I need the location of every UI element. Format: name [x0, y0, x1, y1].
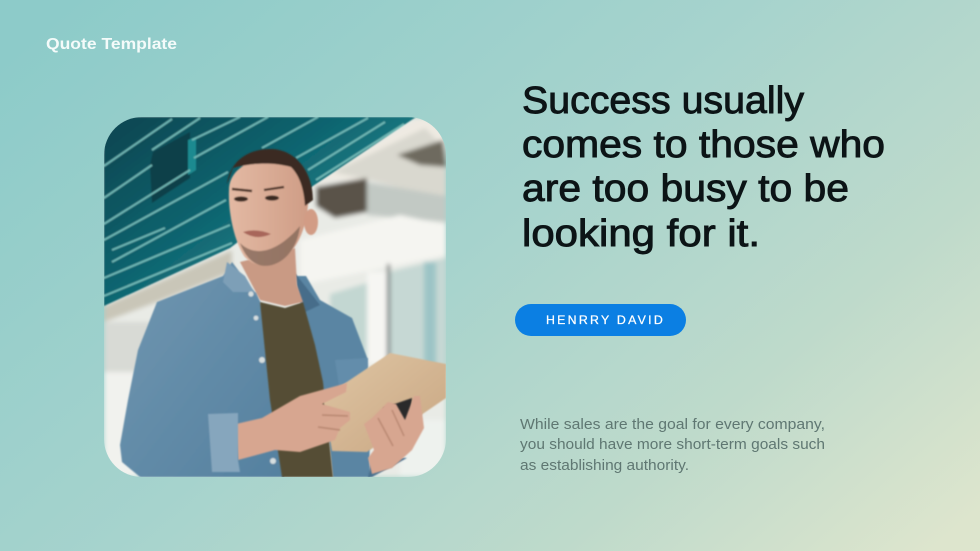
- photo: tablet: [323, 353, 446, 452]
- description text: While sales are the goal for every company,: [520, 416, 825, 433]
- description text: [520, 416, 825, 474]
- heading: Quote Template: Quote Template: [46, 36, 177, 53]
- author badge: [515, 304, 686, 336]
- photo: hands: [236, 383, 424, 474]
- photo: tablet shadow: [393, 397, 413, 420]
- photo: man holding a tablet: [104, 117, 446, 477]
- author badge: HENRRY DAVID: [546, 313, 665, 327]
- photo: right sleeve: [368, 456, 407, 477]
- quote heading: comes to those who: [522, 124, 885, 166]
- photo ceiling: teal slats: [104, 117, 416, 306]
- photo: denim shirt: [120, 262, 370, 477]
- photo: head: [227, 149, 318, 266]
- photo backdrop: building: [104, 117, 446, 477]
- photo: neck: [240, 248, 303, 306]
- quote heading: are too busy to be: [522, 168, 849, 210]
- photo: rolled sleeve: [208, 413, 240, 472]
- photo: olive t-shirt: [260, 302, 333, 477]
- quote heading: [522, 80, 885, 255]
- description text: you should have more short-term goals such: [520, 436, 825, 453]
- quote heading: looking for it.: [522, 213, 760, 255]
- quote heading: Success usually: [522, 80, 804, 122]
- description text: as establishing authority.: [520, 457, 689, 474]
